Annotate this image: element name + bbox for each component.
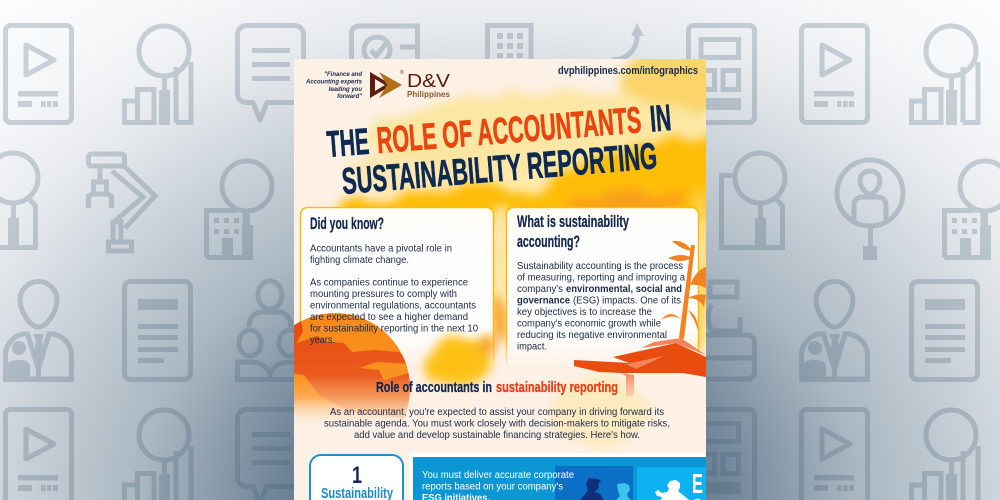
icon: chart magnifier [124,26,191,125]
icon: person search [837,160,903,260]
text: step 1 description: reports based on your company's [422,482,563,492]
icon: building magnifier right [944,161,1000,260]
text block: did you know: are expected to see a higher demand [310,312,468,323]
icon: play document right [802,26,868,122]
watercolor blobs lower [422,340,495,385]
logo [370,69,450,99]
logo: Philippines [407,89,450,99]
text: step 1 description: You must deliver accurate corporate [422,470,574,481]
icon: layout document bottom [688,410,754,500]
logo: ® [400,69,404,76]
title: THE [325,121,370,165]
image: E tile [637,467,706,500]
card: did you know background [300,208,494,368]
icon: chart magnifier right [912,26,978,125]
icon: office building [488,26,531,62]
icon: chart magnifier bottom [124,410,191,500]
text block: what is sustainability accounting: key objectives is to increase the [517,307,652,318]
text block: did you know: for sustainability reporting in the next 10 [310,324,478,334]
text block: what is sustainability accounting: (ESG) impacts. One of its [573,296,681,306]
illustration: hand [574,338,706,397]
text block: what is sustainability accounting: of measuring, reporting and improving a [517,272,685,284]
icon: chart magnifier bottom right [912,410,978,500]
text block: what is sustainability accounting: Sustainability accounting is the process [517,261,683,272]
illustration: setting sun [294,313,410,422]
icon: layout document [688,26,754,122]
text block: did you know: As companies continue to experience [310,278,468,288]
text block: what is sustainability accounting: What is sustainability [517,212,629,231]
icon: speech bubble bottom [237,409,304,500]
text block: did you know: environmental regulations, accountants [310,300,476,312]
icon: magnifier box right [722,153,785,250]
image: people on blue [555,466,633,500]
icon: speech bubble [237,25,304,120]
text block: did you know [310,214,478,346]
card: what is sustainability accounting background [506,208,698,368]
text block: what is sustainability accounting: accounting? [517,232,580,251]
logo: D&V [407,71,450,91]
text block: did you know: years. [310,335,335,346]
title: SUSTAINABILITY REPORTING [340,135,659,202]
logo tagline: forward" [337,94,362,100]
icon: growth arrow [612,23,644,60]
panel: step 1 detail [409,453,706,500]
logo tagline: "Finance and [324,72,362,78]
text block: role intro: sustainable agenda. You must work closely with decision-makers to mitigate risks, [324,418,670,430]
heading: role of accountants [376,380,618,396]
text block: what is sustainability accounting: reducing its negative environmental [517,330,667,341]
text block: did you know: fighting climate change. [310,255,409,266]
icon: checklist [352,26,418,63]
image: E tile: E [692,468,703,499]
icon: desk person [688,282,754,379]
watercolor blobs upper [325,50,737,448]
text: step 1 description [422,470,574,500]
text block: role intro: As an accountant, you're expected to assist your company in driving forward its [330,407,664,418]
card: step 1 label [310,455,403,500]
text block: what is sustainability accounting [517,212,685,352]
card: step 1 label: 1 [352,462,362,489]
text block: what is sustainability accounting: governance [517,296,570,306]
icon: report document right [912,282,978,380]
text block: what is sustainability accounting: impact. [517,342,547,352]
icon: play document bottom [6,410,72,500]
icon: play document [6,26,72,122]
logo tagline [305,72,363,100]
icon: people group [238,281,304,380]
icon: robot arm [88,154,155,251]
title: IN [648,97,673,140]
icon: person in suit right [799,282,870,382]
text block: what is sustainability accounting: company's [517,284,563,295]
icon: play document bottom right [802,410,868,500]
text block: did you know: Accountants have a pivotal role in [310,244,452,254]
text block: what is sustainability accounting: company's economic growth while [517,318,661,330]
title: ROLE OF ACCOUNTANTS [375,99,643,161]
text block: role intro: add value and develop sustainable financing strategies. Here's how. [354,430,640,441]
heading: role of accountants: sustainability reporting [496,379,618,396]
text block: did you know: Did you know? [310,214,384,233]
website url: dvphilippines.com/infographics [558,65,698,77]
text block: did you know: mounting pressures to comply with [310,289,457,300]
logo tagline: leading you [329,87,362,93]
panel: infographic poster [294,59,706,500]
icon: building magnifier [206,161,272,260]
logo tagline: Accounting experts [305,80,363,86]
icon: person in suit [3,282,74,382]
illustration: plant [661,241,706,339]
icon: report document [124,282,190,380]
icon: magnifier box left [0,153,38,250]
text block: what is sustainability accounting: environmental, social and [566,284,682,295]
title [326,104,671,194]
text block: role intro [324,407,670,441]
heading: role of accountants: Role of accountants in [376,379,492,396]
